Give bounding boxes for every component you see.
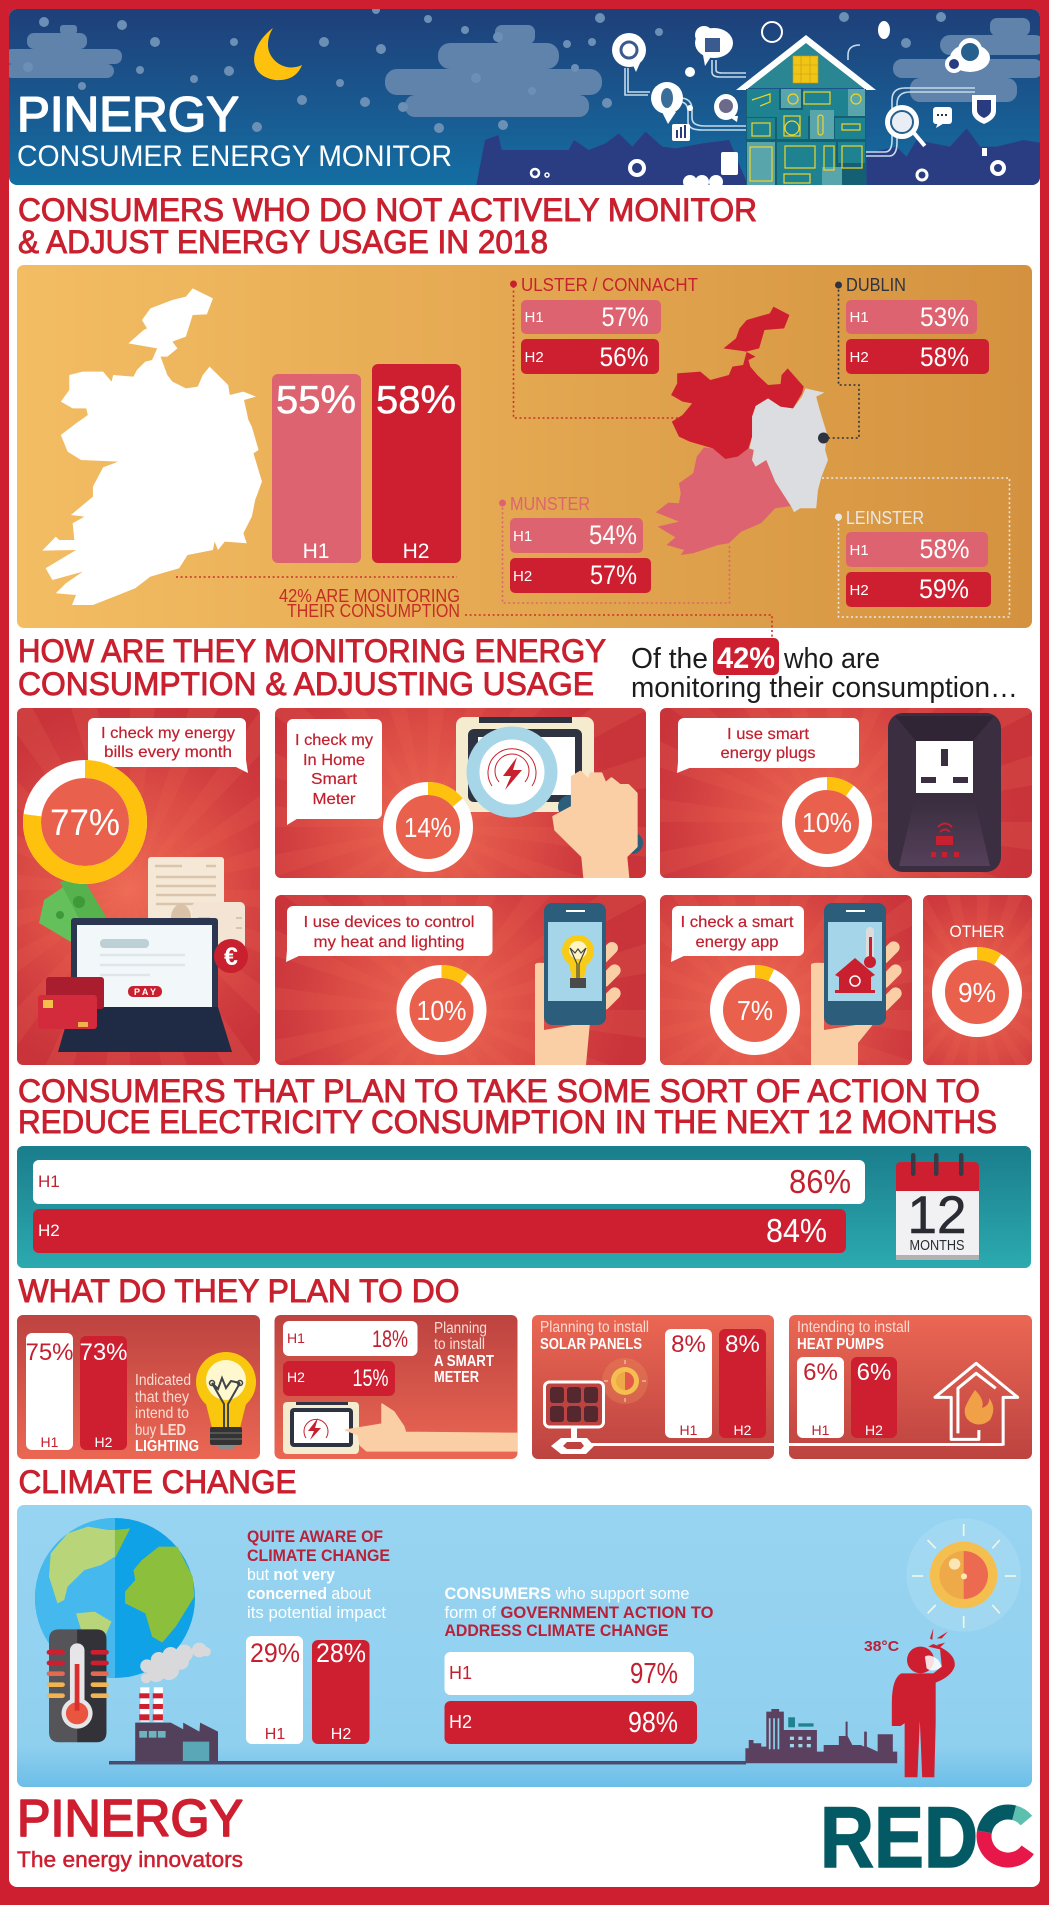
leader dots bbox=[499, 280, 842, 520]
icon: hand holding phone with house bbox=[811, 903, 904, 1065]
bar: H1 6% bbox=[797, 1357, 844, 1438]
region: Munster: H1 bbox=[513, 528, 532, 545]
smart house bbox=[736, 35, 876, 185]
footer logo: Pinergy bbox=[17, 1790, 243, 1872]
panel: in home smart meter 14% bbox=[275, 708, 646, 878]
panel: climate change bbox=[17, 1505, 1032, 1787]
region: Dublin: H2 bbox=[850, 349, 869, 366]
region: Leinster bbox=[846, 508, 991, 607]
region: Ulster / Connacht: H1 bbox=[524, 309, 544, 326]
intro text: of the 42%: monitoring their consumption… bbox=[631, 672, 1018, 704]
speech bubble: I check my energy bbox=[101, 725, 235, 742]
speech bubble: I use smart bbox=[727, 726, 810, 743]
icon: light bulb bbox=[196, 1352, 256, 1450]
donut: 9%: 9% bbox=[958, 977, 996, 1008]
icon: calendar 12 months: MONTHS bbox=[910, 1237, 964, 1254]
note: 42% monitoring: 42% ARE MONITORING bbox=[279, 586, 460, 606]
donut: 14% bbox=[390, 788, 466, 866]
icon: banknotes bbox=[39, 875, 106, 942]
speech bubble: I check a smart bbox=[680, 914, 794, 931]
icon: euro coin: € bbox=[224, 943, 238, 971]
bar: H1 29%: 29% bbox=[250, 1638, 300, 1668]
icon: meter tablet and hand bbox=[283, 1402, 517, 1454]
donut: 10% bbox=[788, 784, 866, 860]
region: Dublin: H1 bbox=[850, 309, 869, 326]
bar: H1 8%: 8% bbox=[671, 1331, 706, 1358]
ground line bbox=[109, 1761, 746, 1764]
heading: plan to take action bbox=[18, 1073, 997, 1140]
panel: Ireland regional monitoring bbox=[17, 265, 1032, 640]
text: government action support: form of GOVERNMENT ACTION TO bbox=[444, 1603, 714, 1622]
clouds bbox=[5, 18, 1045, 117]
heading: consumers who do not monitor bbox=[18, 192, 757, 260]
bar: national H1 55% bbox=[272, 374, 361, 563]
note: 42% monitoring: THEIR CONSUMPTION bbox=[287, 601, 460, 621]
icon: tablet and magnifier bbox=[456, 717, 643, 854]
bar: H2 73% bbox=[79, 1336, 128, 1450]
bar: H2 6%: 6% bbox=[857, 1359, 891, 1386]
region: Ulster / Connacht: 57% bbox=[602, 302, 648, 332]
text: LED lighting: that they bbox=[135, 1389, 189, 1406]
heading: what do they plan to do: WHAT DO THEY PLAN TO DO bbox=[18, 1273, 460, 1309]
bar: H2 84%: H2 bbox=[38, 1221, 60, 1240]
speech bubble: I check my bbox=[295, 732, 373, 749]
bar: H1 97%: 97% bbox=[630, 1658, 678, 1690]
text: smart meter bbox=[434, 1320, 494, 1386]
heading: how are they monitoring: CONSUMPTION & ADJUSTING USAGE bbox=[18, 666, 594, 702]
donut: 10%: 10% bbox=[802, 807, 852, 838]
text: quite aware of climate change: QUITE AWARE OF bbox=[247, 1527, 383, 1546]
bar: H1 18%: H1 bbox=[287, 1330, 305, 1346]
donut: 7% bbox=[716, 972, 794, 1048]
bar: H2 98% bbox=[444, 1701, 697, 1744]
bar: H2 15%: H2 bbox=[287, 1369, 305, 1385]
bar: H2 98%: H2 bbox=[449, 1712, 472, 1732]
city skyline bbox=[476, 128, 1044, 185]
region: Munster: H2 bbox=[513, 568, 532, 585]
region: Ulster / Connacht: H2 bbox=[524, 349, 544, 366]
bar: H2 73%: H2 bbox=[95, 1434, 113, 1450]
label: other: OTHER bbox=[950, 922, 1004, 941]
speech bubble: I use devices to control bbox=[304, 914, 474, 931]
bar: H2 15% bbox=[283, 1361, 395, 1396]
icon: calendar 12 months bbox=[896, 1153, 979, 1260]
stars bbox=[23, 6, 946, 133]
bar: H2 28% bbox=[312, 1638, 370, 1744]
bar: national H1 55%: 55% bbox=[276, 379, 356, 422]
region: Leinster: 59% bbox=[919, 574, 969, 604]
text: LED lighting: LIGHTING bbox=[135, 1438, 199, 1455]
connector lines bbox=[625, 45, 975, 156]
panel: devices heat and lighting 10% bbox=[275, 895, 646, 1065]
region: Ulster / Connacht: ULSTER / CONNACHT bbox=[521, 275, 698, 295]
bar: H2 6%: H2 bbox=[865, 1422, 883, 1438]
panel: smart energy plugs 10% bbox=[660, 708, 1032, 878]
bar: H1 86%: 86% bbox=[789, 1163, 851, 1200]
region: Dublin bbox=[846, 275, 989, 374]
header logo: PINERGY: PINERGY bbox=[17, 88, 239, 142]
footer logo: Pinergy: PINERGY bbox=[17, 1790, 243, 1848]
text: heat pumps: HEAT PUMPS bbox=[797, 1336, 884, 1353]
bar: H1 6%: H1 bbox=[812, 1422, 830, 1438]
region: Munster: 57% bbox=[590, 560, 637, 590]
text: quite aware of climate change bbox=[247, 1527, 390, 1622]
icon: euro coin bbox=[214, 939, 248, 973]
heading: plan to take action: CONSUMERS THAT PLAN TO TAKE SOME SORT OF ACTION TO bbox=[18, 1073, 980, 1109]
text: LED lighting: buy LED bbox=[135, 1422, 186, 1439]
icon: city skyline bbox=[745, 1709, 897, 1763]
icon: laptop bbox=[58, 918, 232, 1052]
text: LED lighting: intend to bbox=[135, 1405, 189, 1422]
header banner bbox=[5, 6, 1045, 189]
donut: 77%: 77% bbox=[50, 802, 120, 843]
speech bubble bbox=[677, 718, 859, 773]
intro text: of the 42% bbox=[631, 638, 1018, 704]
icon: hand holding phone bbox=[535, 903, 623, 1065]
bar: H2 8%: H2 bbox=[734, 1422, 752, 1438]
speech bubble bbox=[671, 906, 804, 962]
region: Munster bbox=[510, 494, 651, 593]
icon: credit cards bbox=[38, 977, 104, 1029]
heading: climate change: CLIMATE CHANGE bbox=[18, 1464, 296, 1500]
bar: H1 29% bbox=[246, 1636, 303, 1744]
text: quite aware of climate change: but not very bbox=[247, 1565, 336, 1584]
bar: national H1 55%: H1 bbox=[303, 540, 329, 563]
text: government action support: CONSUMERS who support some bbox=[444, 1584, 690, 1603]
white bubbles and devices bbox=[612, 21, 996, 189]
panel: solar panels bbox=[532, 1315, 774, 1459]
speech bubble: my heat and lighting bbox=[314, 934, 464, 951]
speech bubble: Meter bbox=[312, 791, 356, 808]
speech bubble bbox=[286, 906, 492, 962]
text: smart meter: Planning bbox=[434, 1320, 487, 1337]
bar: H2 84% bbox=[33, 1209, 846, 1253]
region: Leinster: 58% bbox=[920, 534, 970, 564]
icon: heat pump house bbox=[935, 1363, 1018, 1446]
bar: H2 15%: 15% bbox=[352, 1365, 388, 1392]
panel: smart meter bbox=[274, 1315, 518, 1459]
footer logo: Pinergy: The energy innovators bbox=[17, 1847, 243, 1872]
region: Leinster: H1 bbox=[850, 542, 869, 559]
donut: 7%: 7% bbox=[737, 995, 773, 1026]
panel: heat pumps bbox=[789, 1315, 1032, 1459]
region: Dublin: 53% bbox=[920, 302, 969, 332]
text: heat pumps: Intending to install bbox=[797, 1319, 910, 1336]
region: Dublin: 58% bbox=[920, 342, 969, 372]
note: 42% monitoring bbox=[279, 586, 460, 621]
speech bubble: In Home bbox=[303, 752, 365, 769]
icon: paper bills bbox=[148, 857, 245, 964]
icon: solar panel bbox=[544, 1382, 604, 1454]
text: quite aware of climate change: CLIMATE CHANGE bbox=[247, 1546, 390, 1565]
bar: H2 98%: 98% bbox=[628, 1707, 678, 1739]
icon: globe bbox=[35, 1518, 195, 1678]
panel: energy bills 77% bbox=[17, 708, 260, 1065]
speech bubble bbox=[287, 719, 382, 825]
donut: 77% bbox=[32, 769, 138, 875]
donut: 10% bbox=[403, 972, 480, 1048]
text: quite aware of climate change: concerned about bbox=[247, 1584, 371, 1603]
intro text: of the 42%: 42% bbox=[717, 642, 775, 675]
map: Ireland regions bbox=[656, 307, 828, 555]
text: smart meter: METER bbox=[434, 1369, 479, 1386]
header subtitle: CONSUMER ENERGY MONITOR bbox=[17, 140, 452, 173]
gears bbox=[531, 161, 1004, 180]
dotted leader bbox=[176, 577, 772, 640]
bar: national H2 58%: 58% bbox=[376, 379, 456, 422]
panel: next 12 months bbox=[17, 1146, 1031, 1268]
panel: LED lighting bbox=[17, 1315, 260, 1459]
bar: H2 8%: 8% bbox=[725, 1331, 760, 1358]
bar: H1 29%: H1 bbox=[265, 1726, 285, 1743]
region: Dublin: DUBLIN bbox=[846, 275, 906, 295]
icon: sweating man bbox=[892, 1628, 955, 1777]
text: LED lighting bbox=[135, 1372, 199, 1455]
bar: H1 97%: H1 bbox=[449, 1663, 472, 1683]
bar: H1 8% bbox=[665, 1329, 712, 1438]
icon: sun small bbox=[602, 1358, 648, 1404]
region: Munster: 54% bbox=[589, 520, 637, 550]
bar: H2 28%: 28% bbox=[316, 1638, 366, 1668]
heading: how are they monitoring bbox=[18, 633, 606, 702]
text: government action support: ADDRESS CLIMATE CHANGE bbox=[444, 1621, 668, 1640]
text: government action support bbox=[444, 1584, 714, 1640]
donut: 9% bbox=[938, 954, 1016, 1030]
speech bubble bbox=[88, 718, 248, 773]
map: Ireland silhouette bbox=[42, 288, 262, 605]
icon: sun bbox=[906, 1518, 1021, 1632]
moon bbox=[254, 28, 302, 80]
heading: how are they monitoring: HOW ARE THEY MONITORING ENERGY bbox=[18, 633, 606, 669]
speech bubble: bills every month bbox=[104, 744, 232, 761]
region: Munster: MUNSTER bbox=[510, 494, 590, 514]
text: smart meter: A SMART bbox=[434, 1353, 494, 1370]
icon glyphs bbox=[621, 38, 991, 138]
region: Ulster / Connacht: 56% bbox=[600, 342, 648, 372]
label: 38°C: 38°C bbox=[864, 1638, 899, 1655]
text: LED lighting: Indicated bbox=[135, 1372, 191, 1389]
bar: H2 6% bbox=[851, 1357, 897, 1438]
heading: consumers who do not monitor: CONSUMERS WHO DO NOT ACTIVELY MONITOR bbox=[18, 192, 757, 228]
intro text: of the 42%: who are bbox=[783, 643, 880, 675]
text: heat pumps bbox=[797, 1319, 910, 1353]
bar: national H2 58%: H2 bbox=[403, 540, 429, 563]
region: Leinster: H2 bbox=[850, 582, 869, 599]
bar: H1 6%: 6% bbox=[803, 1359, 838, 1386]
speech bubble: energy plugs bbox=[720, 745, 816, 762]
speech bubble: Smart bbox=[311, 771, 358, 788]
bar: H1 18%: 18% bbox=[372, 1326, 408, 1353]
speech bubble: energy app bbox=[696, 934, 779, 951]
bar: H1 97% bbox=[444, 1652, 694, 1695]
bar: H1 8%: H1 bbox=[680, 1422, 698, 1438]
connector line: solar to heat pump bbox=[590, 1443, 1003, 1446]
bar: H1 86% bbox=[33, 1160, 865, 1204]
bar: national H2 58% bbox=[372, 364, 461, 563]
donut: 10%: 10% bbox=[416, 995, 466, 1026]
intro text: of the 42%: Of the bbox=[631, 643, 708, 675]
region: Ulster / Connacht bbox=[521, 275, 698, 374]
icon: hand bbox=[553, 772, 636, 878]
bar: H2 73%: 73% bbox=[79, 1339, 128, 1366]
bar: H1 75%: H1 bbox=[41, 1434, 59, 1450]
bar: H2 84%: 84% bbox=[766, 1212, 827, 1249]
bar: H1 18% bbox=[283, 1321, 418, 1356]
bar: H1 75%: 75% bbox=[25, 1339, 74, 1366]
panel: smart energy app 7% bbox=[660, 895, 912, 1065]
icon: smart plug bbox=[888, 713, 1001, 872]
icon: thermometer bbox=[49, 1629, 106, 1742]
text: quite aware of climate change: its potential impact bbox=[247, 1603, 386, 1622]
text: solar panels: SOLAR PANELS bbox=[540, 1336, 642, 1353]
icon: laptop: PAY bbox=[134, 987, 156, 997]
text: solar panels: Planning to install bbox=[540, 1319, 649, 1336]
text: solar panels bbox=[540, 1319, 649, 1353]
heading: plan to take action: REDUCE ELECTRICITY CONSUMPTION IN THE NEXT 12 MONTHS bbox=[18, 1104, 997, 1140]
bar: H1 86%: H1 bbox=[38, 1172, 60, 1191]
bar: H1 75% bbox=[25, 1333, 74, 1450]
icon: calendar 12 months: 12 bbox=[908, 1186, 966, 1245]
bar: H2 28%: H2 bbox=[331, 1726, 351, 1743]
leaders: regions bbox=[502, 285, 1010, 617]
heading: consumers who do not monitor: & ADJUST ENERGY USAGE IN 2018 bbox=[18, 224, 548, 260]
panel: other 9% bbox=[923, 895, 1032, 1065]
footer logo: REDC: RED bbox=[820, 1790, 978, 1886]
icon: factory bbox=[135, 1643, 218, 1763]
region: Leinster: LEINSTER bbox=[846, 508, 924, 528]
donut: 14%: 14% bbox=[404, 812, 452, 843]
text: smart meter: to install bbox=[434, 1336, 485, 1353]
bar: H2 8% bbox=[719, 1329, 766, 1438]
